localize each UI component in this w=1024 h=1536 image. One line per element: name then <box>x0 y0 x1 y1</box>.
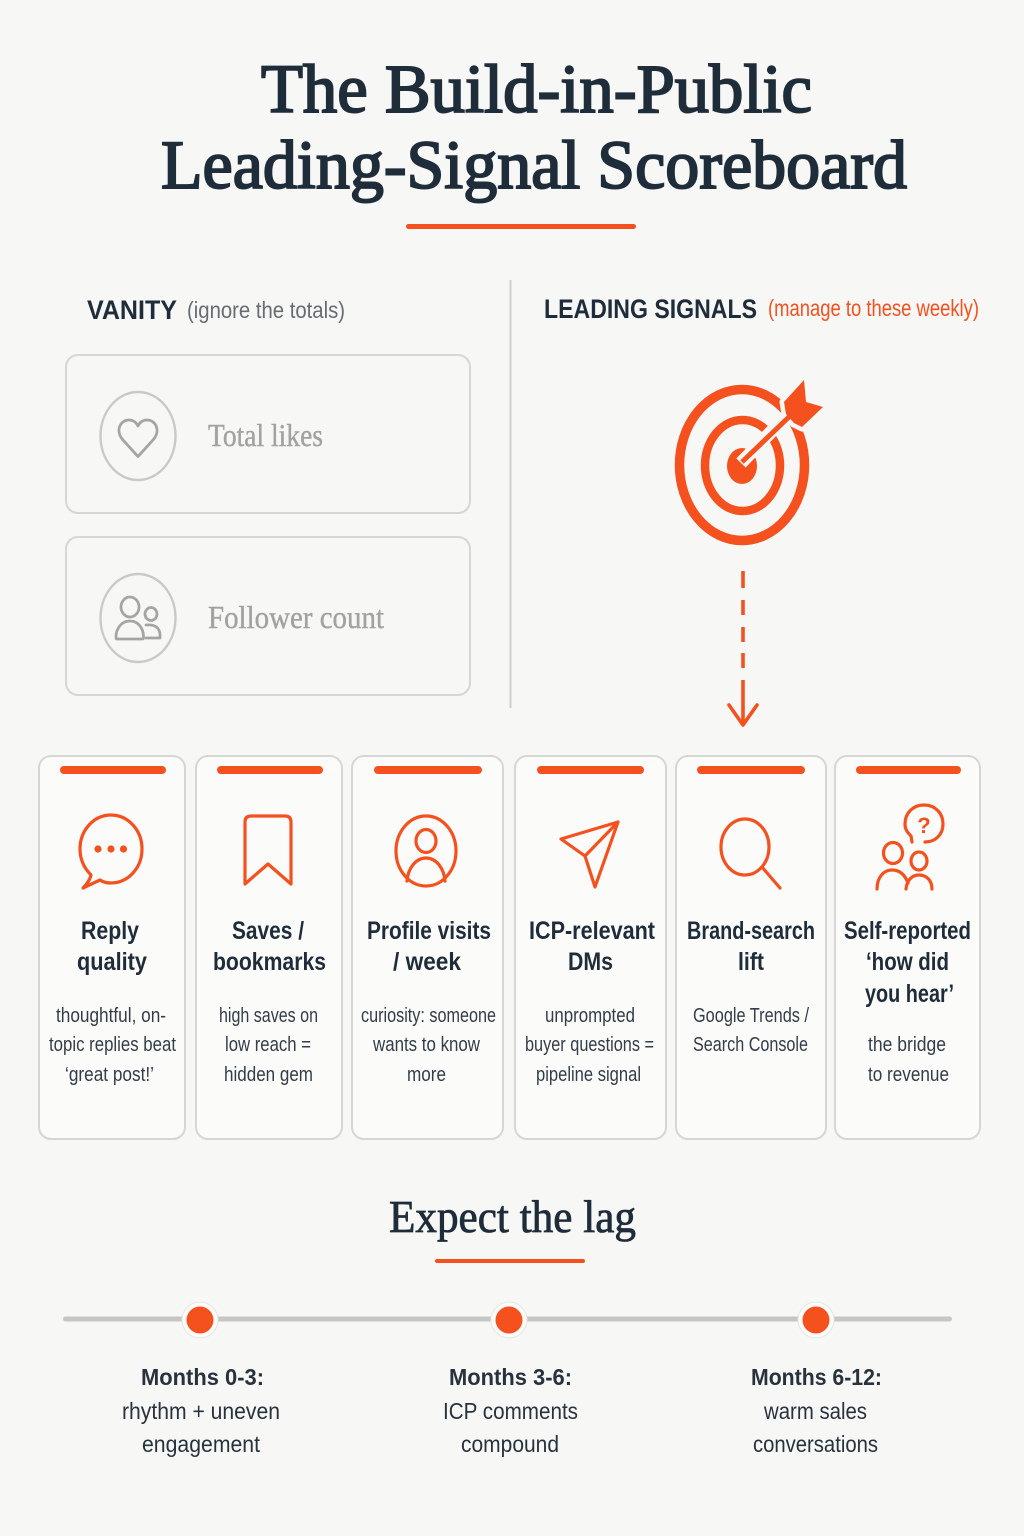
description: saves: high saves on <box>219 1005 318 1027</box>
description: profile visits: curiosity: someone <box>361 1005 496 1027</box>
icon: heart <box>100 392 176 480</box>
heading: vanity: (ignore the totals) <box>187 297 345 323</box>
description: icp dms: pipeline signal <box>536 1064 641 1086</box>
heading underline <box>435 1259 585 1263</box>
heading: brand search <box>687 917 815 976</box>
panel divider <box>510 280 512 708</box>
milestone marker: months 3-6 <box>491 1302 527 1338</box>
description: reply quality: ‘great post!’ <box>65 1064 154 1086</box>
description: self-reported: the bridge <box>868 1034 946 1056</box>
heading: brand search: Brand-search <box>687 917 815 945</box>
icon: bookmark <box>245 816 291 884</box>
icon: speech bubble <box>80 815 142 888</box>
heading: leading signals: (manage to these weekly) <box>768 295 979 321</box>
heading: icp dms <box>529 917 656 976</box>
milestone text: months 0-3: engagement <box>142 1431 260 1457</box>
card: icp dms <box>515 756 666 1139</box>
title: The Build-in-Public <box>261 51 812 127</box>
milestone text: months 3-6 <box>443 1364 578 1457</box>
description: brand search: Google Trends / <box>693 1005 809 1027</box>
milestone marker: months 0-3 <box>182 1302 218 1338</box>
heading: icp dms: DMs <box>568 948 613 976</box>
icon: profile <box>396 816 456 886</box>
title: Leading-Signal Scoreboard <box>161 127 907 203</box>
description: profile visits <box>361 1005 496 1086</box>
icon: paper plane <box>561 822 618 887</box>
heading: saves: bookmarks <box>213 948 326 976</box>
card: profile visits <box>352 756 503 1139</box>
description: icp dms <box>525 1005 654 1086</box>
description: reply quality <box>49 1005 176 1086</box>
icon: target with arrow <box>680 380 823 540</box>
icon: followers <box>100 574 176 662</box>
milestone text: months 6-12: conversations <box>753 1431 878 1457</box>
heading: self-reported: ‘how did <box>866 948 949 976</box>
description: profile visits: wants to know <box>372 1034 480 1056</box>
milestone text: months 0-3 <box>122 1364 280 1457</box>
description: brand search: Search Console <box>693 1034 808 1056</box>
title <box>161 51 907 203</box>
milestone marker: months 6-12 <box>798 1302 834 1338</box>
label: follower count: Follower count <box>208 599 384 635</box>
icon: people with question <box>877 805 943 889</box>
label: total likes: Total likes <box>208 417 323 453</box>
heading: profile visits: / week <box>393 948 461 976</box>
timeline <box>63 1302 952 1338</box>
heading: self-reported: Self-reported <box>844 917 971 945</box>
description: saves <box>219 1005 318 1086</box>
milestone text: months 0-3: Months 0-3: <box>141 1364 264 1390</box>
heading: expect the lag: Expect the lag <box>389 1191 636 1242</box>
heading: vanity: VANITY <box>87 295 177 325</box>
heading: icp dms: ICP-relevant <box>529 917 656 945</box>
milestone text: months 3-6: ICP comments <box>443 1398 578 1424</box>
description: reply quality: topic replies beat <box>49 1034 176 1056</box>
icon: people with question: ? <box>917 813 931 838</box>
heading: reply quality: quality <box>77 948 147 976</box>
heading: self-reported <box>844 917 971 1008</box>
heading: leading signals <box>544 294 979 324</box>
heading: saves: Saves / <box>232 917 304 945</box>
description: profile visits: more <box>407 1064 446 1086</box>
card: reply quality <box>39 756 185 1139</box>
card: brand search <box>676 756 826 1139</box>
description: icp dms: unprompted <box>545 1005 635 1027</box>
milestone text: months 6-12: Months 6-12: <box>751 1364 882 1390</box>
heading: self-reported: you hear’ <box>865 980 954 1008</box>
heading: brand search: lift <box>738 948 765 976</box>
milestone text: months 6-12 <box>751 1364 882 1457</box>
milestone text: months 0-3: rhythm + uneven <box>122 1398 280 1424</box>
description: self-reported: to revenue <box>868 1064 949 1086</box>
arrow: dashed down <box>729 571 757 725</box>
milestone text: months 6-12: warm sales <box>763 1398 867 1424</box>
description: saves: hidden gem <box>224 1064 313 1086</box>
heading: profile visits <box>367 917 491 976</box>
card: saves <box>196 756 342 1139</box>
heading: saves <box>213 917 326 976</box>
heading: profile visits: Profile visits <box>367 917 491 945</box>
heading: reply quality <box>77 917 147 976</box>
description: brand search <box>693 1005 809 1056</box>
description: icp dms: buyer questions = <box>525 1034 654 1056</box>
description: saves: low reach = <box>225 1034 311 1056</box>
description: self-reported <box>868 1034 949 1086</box>
milestone text: months 3-6: Months 3-6: <box>449 1364 572 1390</box>
title underline <box>406 224 636 229</box>
panel: follower count <box>66 537 470 695</box>
panel: total likes <box>66 355 470 513</box>
heading: leading signals: LEADING SIGNALS <box>544 294 757 324</box>
heading: vanity <box>87 295 345 325</box>
icon: magnifier <box>721 819 780 888</box>
milestone text: months 3-6: compound <box>461 1431 559 1457</box>
heading: reply quality: Reply <box>81 917 139 945</box>
description: reply quality: thoughtful, on- <box>56 1005 166 1027</box>
card: self-reported <box>835 756 980 1139</box>
